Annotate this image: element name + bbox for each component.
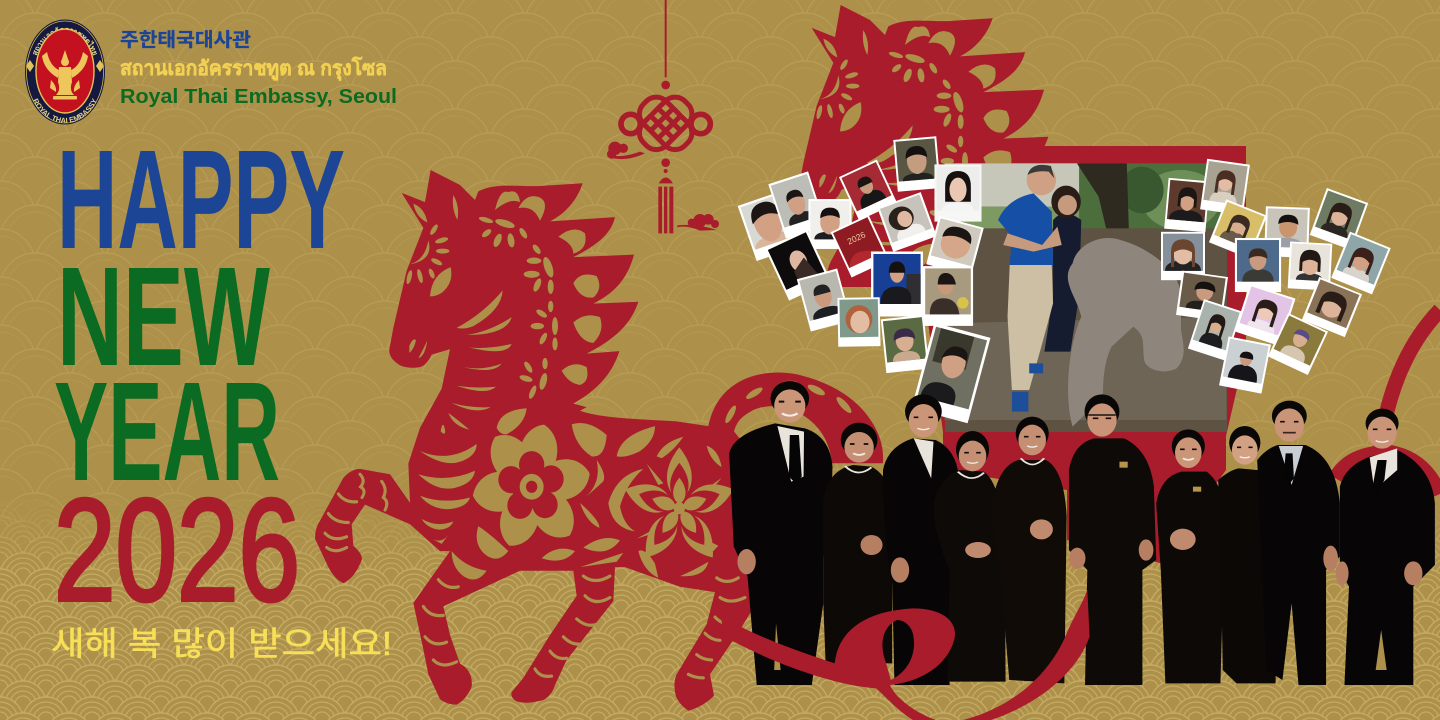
staff member 6: ambassador (1069, 394, 1156, 685)
polaroid: man close-up (738, 191, 800, 261)
polaroid collage, right cluster (1161, 159, 1391, 394)
seal ring text: ROYAL THAI EMBASSY (33, 98, 96, 123)
headline: HAPPY: HAPPY (57, 120, 345, 278)
main photo: ambassador with elephant (945, 163, 1227, 432)
knot body (624, 82, 707, 165)
polaroid: woman with green glasses (881, 315, 929, 373)
horse silhouette (315, 170, 883, 711)
polaroid: woman on blue sky (1235, 238, 1281, 292)
staff member 4 (934, 431, 1006, 682)
polaroid: red 2026: 2026 (846, 229, 867, 247)
polaroid: woman top right (1310, 188, 1368, 250)
polaroid: woman with bangs (934, 164, 982, 222)
polaroid: woman on blue (871, 252, 923, 316)
polaroid: orange-haired woman (837, 297, 881, 347)
polaroid: woman in red room (839, 159, 897, 221)
polaroid: woman on dark (1164, 178, 1210, 232)
polaroid: large woman portrait (912, 323, 990, 423)
greeting in Korean: 새해 복 많이 받으세요! (51, 625, 392, 662)
headline: NEW: NEW (57, 237, 270, 395)
polaroid: woman on black (765, 229, 831, 301)
polaroid: woman with flower (923, 266, 973, 326)
leg scallops and tail leaves (325, 474, 745, 678)
staff member 5 (991, 417, 1067, 683)
paper-cut horse (315, 170, 883, 711)
staff member 2 (823, 423, 892, 663)
polaroid: woman with autumn trees (1268, 313, 1328, 375)
polaroid: man in glasses on grey (797, 268, 851, 332)
staff member 1 (729, 381, 832, 685)
embassy name, Korean: 주한태국대사관 (120, 29, 251, 51)
headline: YEAR: YEAR (54, 352, 280, 510)
polaroid: woman on pink (1234, 284, 1296, 346)
second horse, cropped by the frame (801, 5, 1048, 287)
tassel (659, 177, 673, 183)
embassy seal (25, 20, 105, 124)
seal ring text: สถานเอกอัครราชทูตไทย (33, 26, 98, 56)
polaroid: man on grey (768, 171, 826, 239)
staff member 7 (1156, 429, 1225, 683)
seal ring text (33, 26, 98, 123)
polaroid: woman outdoors (1331, 232, 1391, 294)
elephant (1068, 238, 1184, 427)
polaroid: person in snow (1219, 336, 1271, 394)
polaroid collage, left cluster (738, 136, 990, 423)
woman behind (1044, 186, 1081, 352)
right ribbon sweep (1335, 310, 1440, 494)
hanging Chinese knot ornament (607, 0, 719, 233)
red frame behind the photo (925, 146, 1246, 563)
polaroid: smiling man (926, 216, 984, 276)
embassy name, English: Royal Thai Embassy, Seoul (120, 86, 397, 108)
polaroid: woman on phone (1176, 271, 1228, 321)
polaroid: man on white (808, 199, 852, 249)
cloud right (677, 214, 719, 231)
large flower (470, 420, 594, 553)
polaroid: woman in selfie (1200, 159, 1250, 215)
cloud left (607, 142, 645, 159)
polaroid: woman on yellow (1209, 199, 1267, 259)
second flower (621, 447, 737, 565)
photo backdrop (945, 163, 1227, 230)
staff member 3 (883, 394, 959, 685)
polaroid: red 2026 (831, 215, 889, 277)
polaroid: woman smiling on light (1288, 242, 1332, 290)
polaroid: woman close selfie (1302, 277, 1362, 337)
staff member 8 (1218, 426, 1278, 683)
garuda emblem (42, 50, 88, 100)
polaroid: woman with long hair (1161, 232, 1205, 280)
staff member 9 (1257, 401, 1340, 685)
man in blue polo (998, 165, 1062, 412)
polaroid: woman in white (877, 192, 937, 252)
horse gold cut-outs (405, 191, 722, 580)
red ribbon loop in front of the staff (720, 590, 1090, 720)
polaroid: woman by window (1188, 299, 1242, 361)
embassy staff group (729, 381, 1435, 685)
embassy name, Thai: สถานเอกอัครราชทูต ณ กรุงโซล (120, 56, 387, 82)
headline: 2026: 2026 (54, 469, 300, 631)
staff member 10 (1336, 409, 1435, 685)
polaroid: man with glasses, dark (893, 136, 941, 192)
polaroid: young man (1264, 206, 1310, 258)
